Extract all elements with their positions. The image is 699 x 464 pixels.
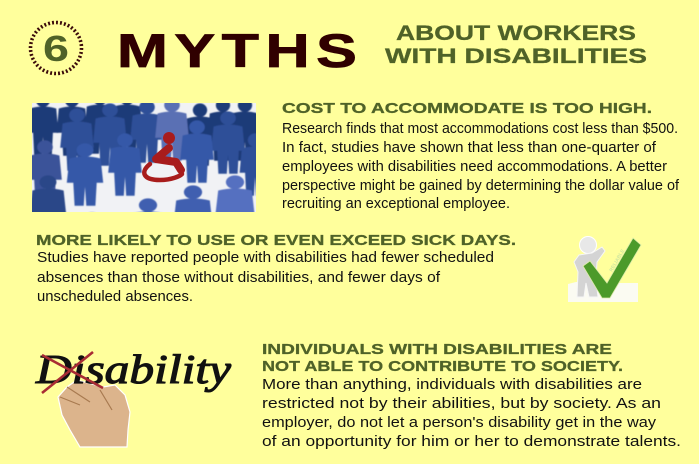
photo: crowd of blue figures with red wheelchair symbol (32, 103, 256, 212)
icon: figure with green check mark: RELIABLE (609, 248, 627, 273)
myth 3 body: employer, do not let a person's disability get in the way (262, 415, 657, 431)
myth 3 heading: NOT ABLE TO CONTRIBUTE TO SOCIETY. (262, 358, 623, 375)
myth 2 body: unscheduled absences. (37, 289, 193, 305)
myth 1 body: recruiting an exceptional employee. (282, 196, 510, 212)
myth 3 heading: INDIVIDUALS WITH DISABILITIES ARE (262, 341, 612, 358)
myth 3 body: of an opportunity for him or her to demonstrate talents. (262, 434, 681, 450)
myth 3 body: restricted not by their abilities, but by society. As an (262, 396, 661, 412)
myth 1 body: perspective might be gained by determining the dollar value of (282, 178, 680, 194)
myth 3 heading (262, 341, 623, 375)
myth 2 heading: MORE LIKELY TO USE OR EVEN EXCEED SICK DAYS. (36, 232, 516, 249)
badge: number 6 (30, 22, 82, 74)
myth 2 body (37, 250, 494, 305)
subtitle: WITH DISABILITIES (385, 45, 647, 68)
subtitle: ABOUT WORKERS (396, 22, 636, 45)
picture: hand writing crossed-out Disability (35, 346, 232, 447)
myth 1 body: employees with disabilities need accommodations. A better (282, 159, 667, 175)
myth 1 body: In fact, studies have shown that less than one-quarter of (282, 140, 657, 156)
icon: red wheelchair symbol (144, 132, 182, 180)
myth 1 body: Research finds that most accommodations cost less than $500. (282, 121, 678, 137)
myth 3 body (262, 377, 681, 450)
myth 2 body: Studies have reported people with disabilities had fewer scheduled (37, 250, 494, 266)
myth 2 body: absences than those without disabilities, and fewer days of (37, 270, 441, 286)
icon: figure with green check mark (568, 236, 641, 302)
subtitle (385, 22, 647, 68)
myth 1 heading: COST TO ACCOMMODATE IS TOO HIGH. (282, 100, 652, 117)
handwritten word: Disability (35, 346, 232, 392)
myth 1 body (282, 121, 680, 212)
myth 3 body: More than anything, individuals with disabilities are (262, 377, 642, 393)
title: MYTHS: MYTHS (117, 25, 363, 77)
badge: number 6: 6 (43, 28, 69, 69)
